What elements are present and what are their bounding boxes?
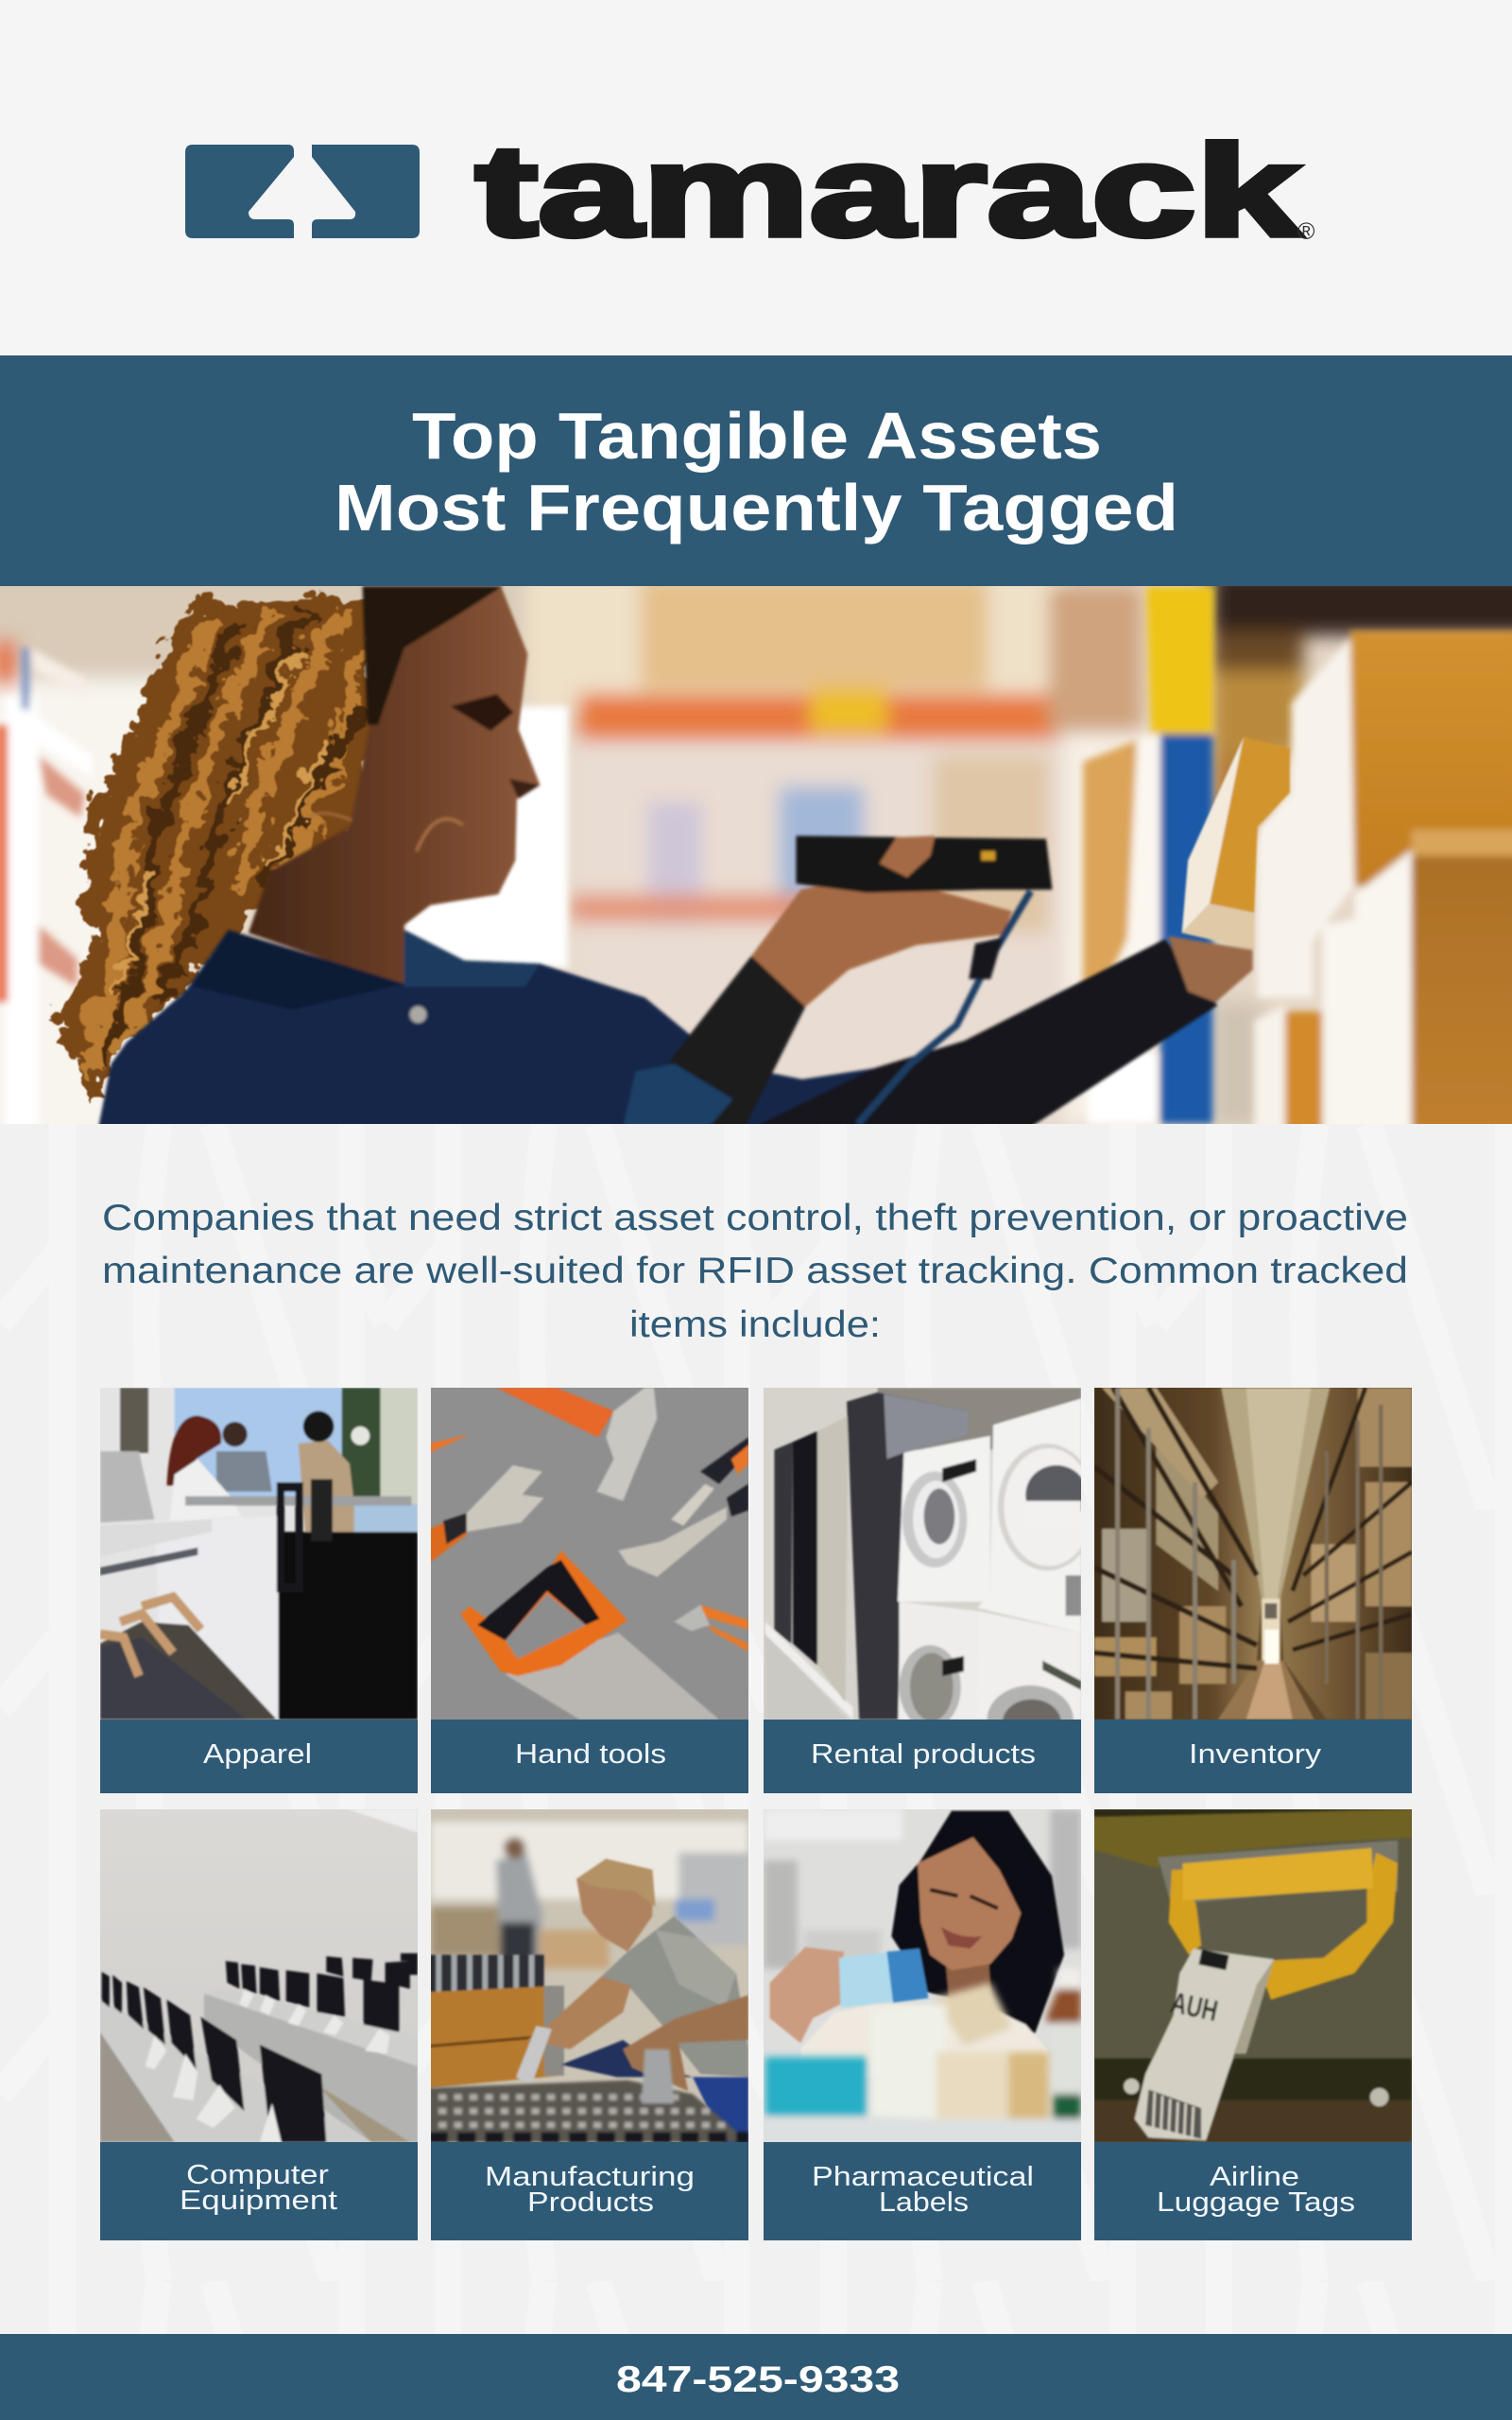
label bar — [764, 2142, 1081, 2240]
title line 1: Top Tangible Assets — [412, 399, 1102, 473]
card: Rental products — [764, 1388, 1096, 1793]
photo: factory worker with metal parts — [431, 1809, 748, 2142]
wordmark: tamarack — [475, 119, 1301, 264]
photo: hand tools on concrete — [431, 1388, 748, 1720]
label line 2: Labels — [879, 2187, 969, 2218]
photo: pharmacist reading medicine box — [764, 1809, 1081, 2142]
card: Airline Luggage Tags — [1092, 1809, 1412, 2240]
photo: refrigerators and washers — [764, 1388, 1081, 1720]
skin: face and neck — [249, 588, 540, 987]
intro paragraph: Companies that need strict asset control, theft prevention, or proactive — [102, 1198, 1408, 1238]
card: Apparel — [100, 1388, 418, 1793]
holding hand — [751, 876, 1012, 1007]
held box — [1182, 737, 1290, 950]
photo: luggage tag on yellow handle — [1094, 1809, 1412, 2142]
footer bar — [0, 2334, 1512, 2420]
icon: tamarack logo mark — [185, 145, 420, 238]
shelves, posts and boxes — [404, 586, 1512, 1133]
dark hairline — [363, 586, 503, 725]
worker figure — [51, 586, 1253, 1133]
title banner — [0, 355, 1512, 587]
lanyard — [858, 891, 1031, 1124]
label: Inventory — [1189, 1739, 1322, 1770]
hair — [51, 589, 370, 1098]
label line 1: Pharmaceutical — [812, 2162, 1034, 2192]
label bar — [431, 1720, 748, 1793]
label: Rental products — [811, 1739, 1036, 1770]
photo: computer lab — [100, 1809, 418, 2142]
label line 1: Computer — [186, 2160, 329, 2190]
reaching hand — [1168, 936, 1253, 1002]
label: Apparel — [203, 1739, 312, 1770]
card: Pharmaceutical Labels — [764, 1809, 1081, 2240]
phone number: 847-525-9333 — [616, 2360, 900, 2400]
navy shirt — [97, 930, 873, 1133]
label bar — [1094, 1720, 1412, 1793]
hero photo: worker scanning boxes with RFID reader — [0, 586, 1512, 1124]
RFID scanner — [796, 836, 1052, 892]
label bar — [100, 2142, 418, 2240]
logo — [185, 119, 1315, 264]
card: Computer Equipment — [100, 1809, 418, 2240]
card: Inventory — [1094, 1388, 1412, 1793]
intro paragraph — [102, 1198, 1408, 1345]
label bar — [431, 2142, 748, 2240]
registered mark: ® — [1297, 218, 1315, 245]
label bar — [100, 1720, 418, 1793]
label line 2: Equipment — [180, 2186, 337, 2216]
label bar — [1094, 2142, 1412, 2240]
cuff strap — [622, 1063, 733, 1133]
intro paragraph: items include: — [629, 1305, 881, 1345]
left rack — [0, 648, 93, 1129]
label line 2: Products — [527, 2187, 654, 2218]
photo: warehouse aisle — [1094, 1388, 1412, 1720]
intro paragraph: maintenance are well-suited for RFID asset tracking. Common tracked — [102, 1251, 1408, 1291]
label line 1: Airline — [1210, 2162, 1299, 2192]
patterned background of content area — [0, 1124, 1512, 2334]
black sleeves — [741, 939, 1217, 1133]
label line 2: Luggage Tags — [1157, 2187, 1355, 2218]
photo: clothing store — [100, 1388, 418, 1720]
label line 1: Manufacturing — [485, 2162, 695, 2192]
label: Hand tools — [515, 1739, 666, 1770]
label bar — [764, 1720, 1081, 1793]
blurred warehouse background — [0, 571, 1512, 1141]
tag code: AUH — [1168, 1986, 1221, 2028]
card: Manufacturing Products — [429, 1809, 748, 2240]
card: Hand tools — [429, 1388, 748, 1793]
title line 2: Most Frequently Tagged — [335, 471, 1178, 544]
